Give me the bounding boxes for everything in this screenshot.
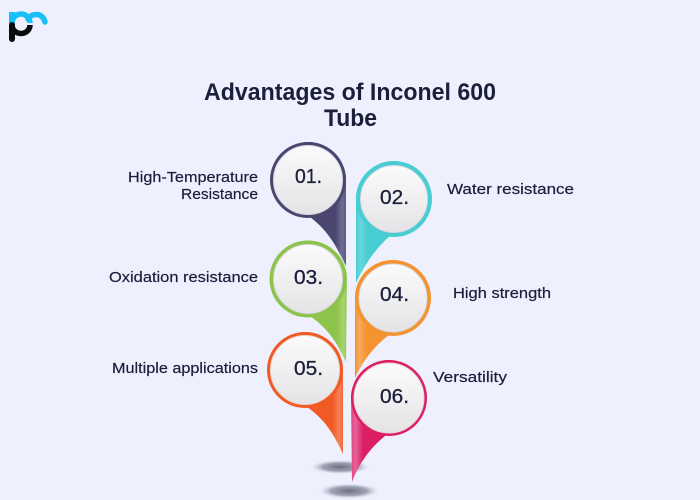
label: high-temperature resistance: Resistance — [181, 186, 258, 203]
pin 05: 05. — [294, 358, 323, 380]
pin 03 — [270, 240, 347, 362]
pin 02: 02. — [380, 187, 409, 209]
pin 02 — [356, 161, 432, 283]
shadow: pin 5 — [311, 460, 369, 474]
title: Advantages of Inconel 600 — [204, 79, 496, 106]
pin 05 — [267, 332, 343, 454]
pin 01: 01. — [295, 166, 322, 188]
label: high-temperature resistance: High-Temperature — [128, 169, 258, 186]
label: oxidation resistance: Oxidation resistance — [109, 269, 258, 286]
title — [204, 79, 496, 132]
pin 03: 03. — [294, 267, 323, 289]
label: water resistance: Water resistance — [447, 181, 574, 198]
pin 06 — [351, 360, 427, 482]
label: versatility: Versatility — [433, 369, 508, 386]
shadow: pin 6 — [319, 484, 379, 498]
label: high-temperature resistance — [128, 169, 258, 203]
logo — [9, 12, 45, 39]
label: high strength: High strength — [453, 285, 551, 302]
pin 04 — [355, 260, 431, 378]
pin 04: 04. — [380, 284, 409, 306]
title: Tube — [324, 105, 377, 132]
label: multiple applications: Multiple applications — [112, 360, 258, 377]
pin 06: 06. — [380, 386, 409, 408]
pin 01 — [270, 142, 346, 266]
